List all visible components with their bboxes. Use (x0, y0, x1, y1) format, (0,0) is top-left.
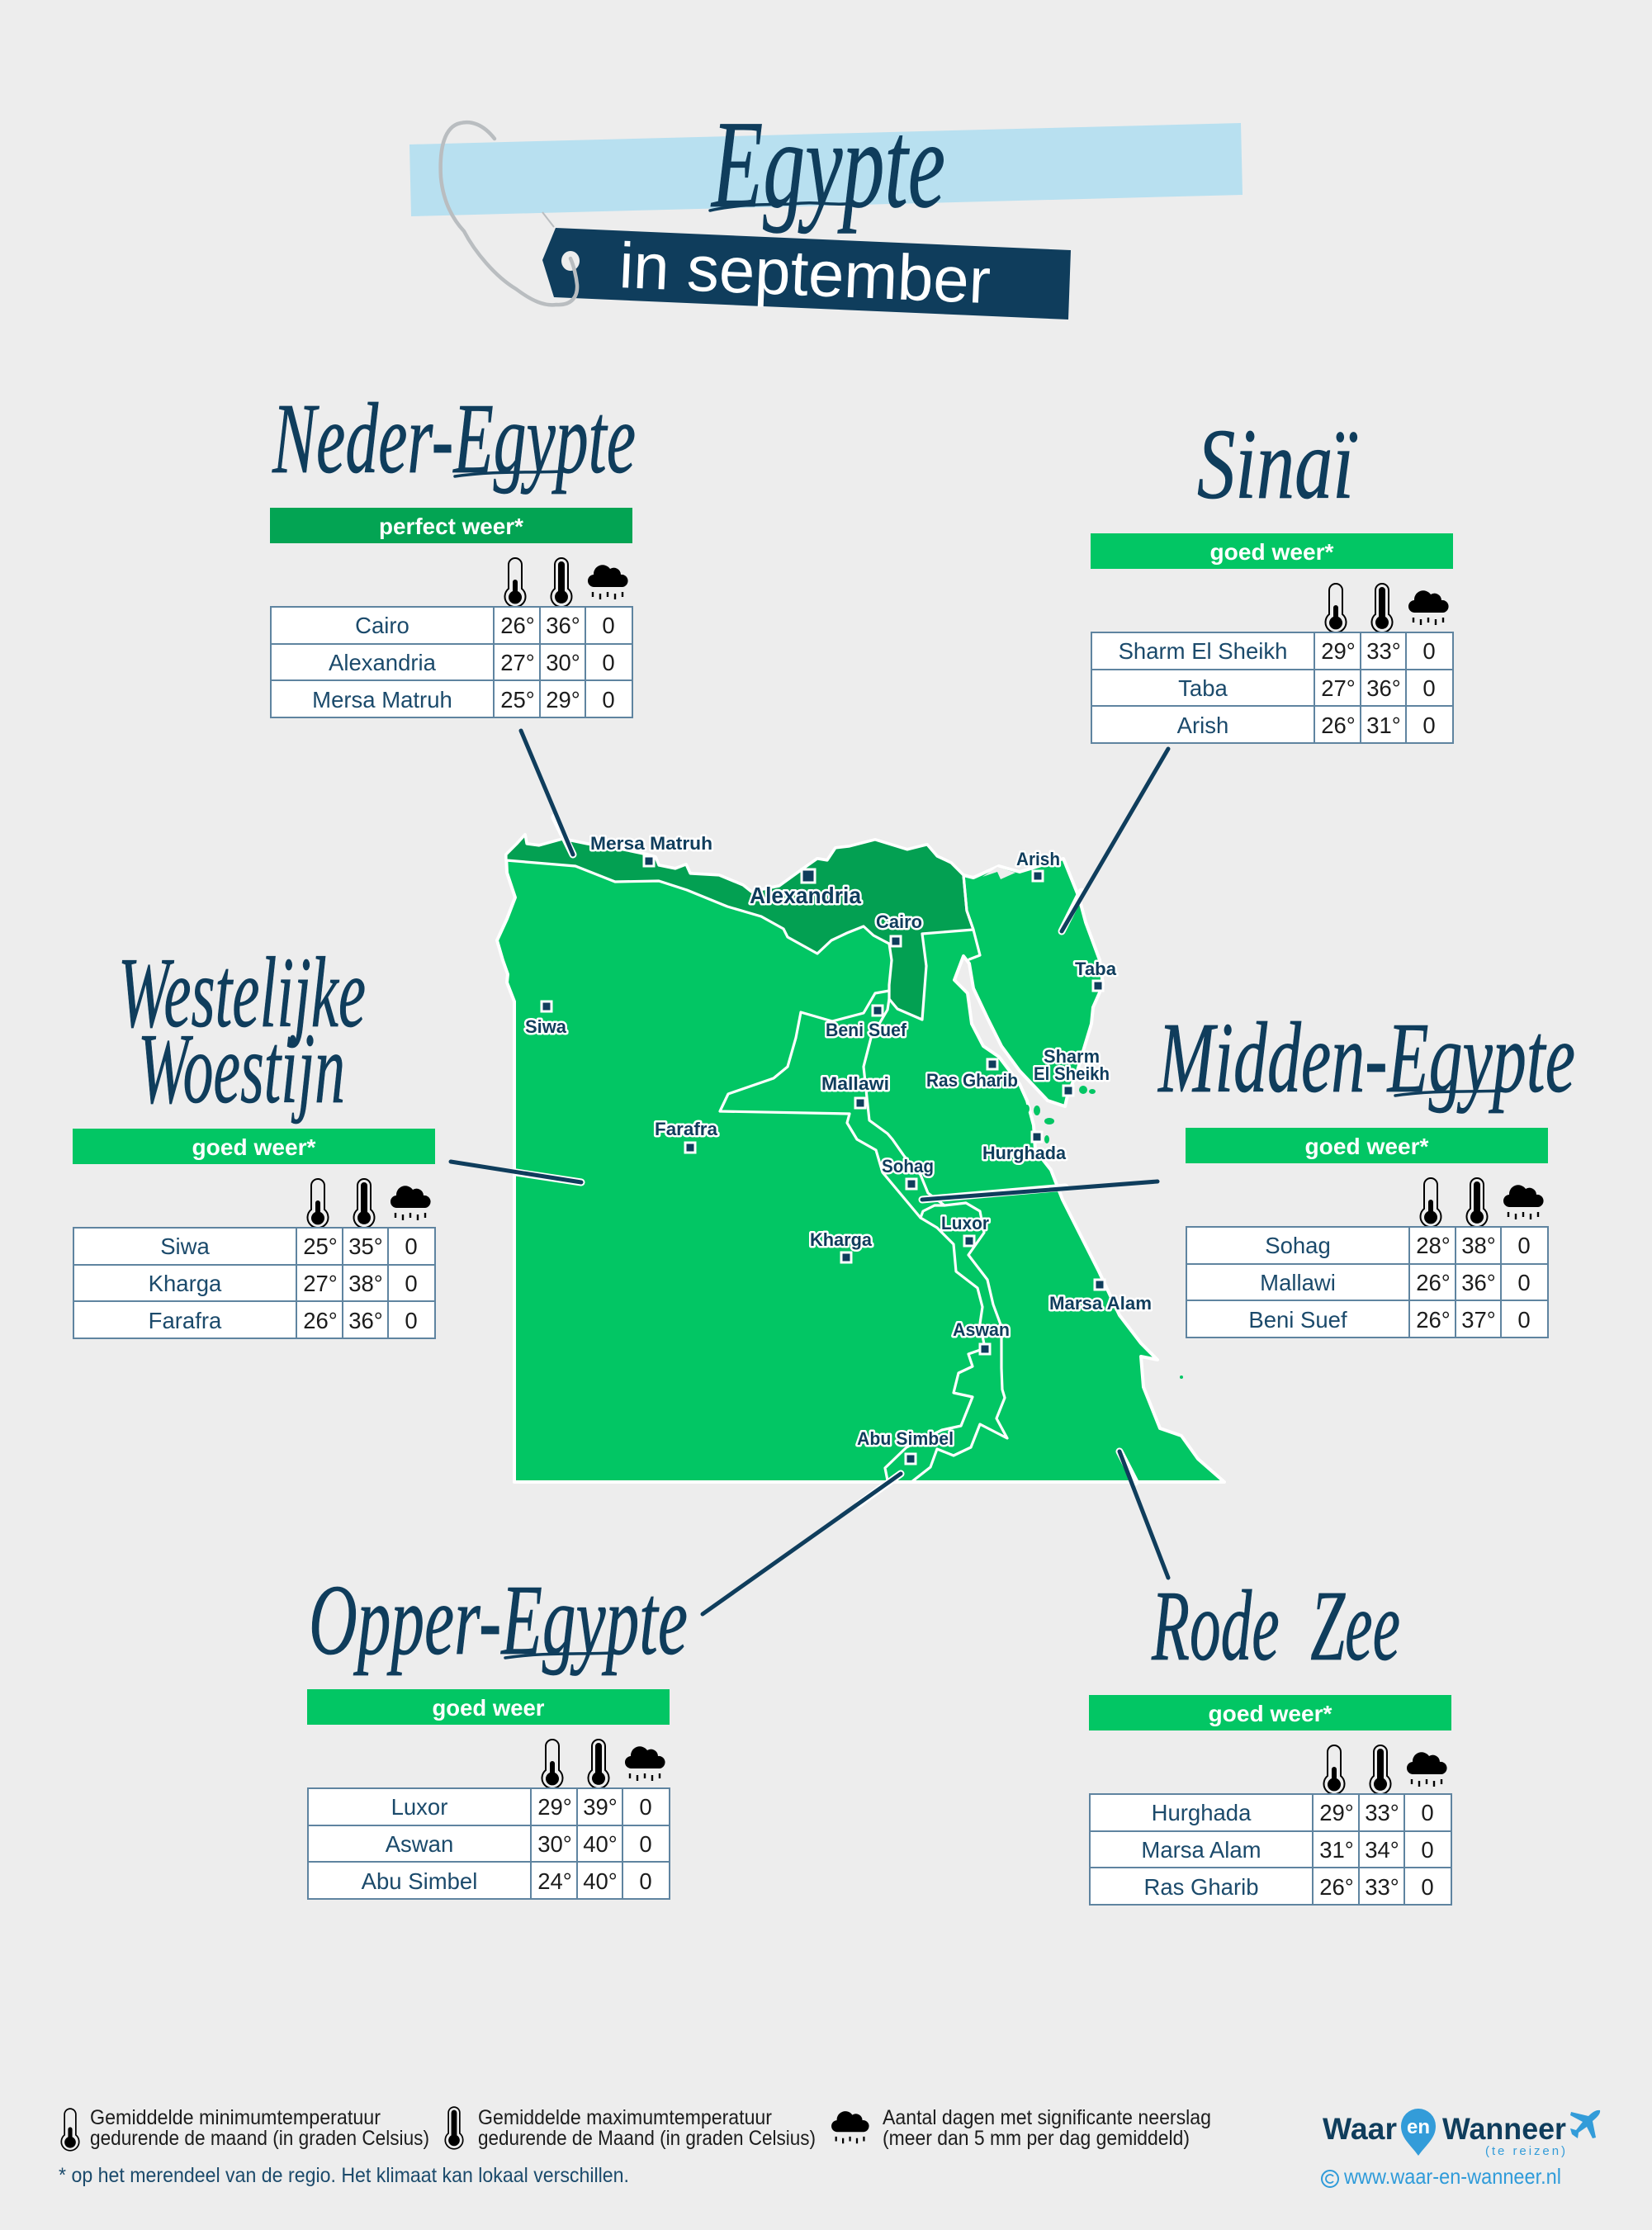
tag shape (542, 228, 1071, 320)
icon: minimum temperature (505, 558, 525, 607)
table cells: Alexandria (329, 650, 437, 675)
table cells: 34° (1365, 1837, 1399, 1863)
weather rating bar: goed weer (433, 1695, 545, 1721)
Red Sea islands (1025, 1086, 1183, 1379)
icon: maximum temperature (1466, 1178, 1488, 1227)
city: Alexandria: Alexandria (750, 883, 861, 908)
table cells: Sharm El Sheikh (1119, 638, 1287, 664)
table cells: 36° (1366, 675, 1401, 701)
table cells: 29° (537, 1794, 572, 1820)
weather table (1186, 1128, 1548, 1338)
legend: rain days: Aantal dagen met significante neerslag (883, 2106, 1211, 2129)
table cells (271, 607, 632, 717)
table cells: 27° (1321, 675, 1356, 701)
icon: rain (1503, 1185, 1544, 1219)
city: Ras Gharib (926, 1059, 1018, 1091)
panel: Rode Zee (1089, 1570, 1451, 1905)
city: Arish (1016, 849, 1060, 881)
table cells: 0 (405, 1308, 418, 1333)
heading: Neder-Egypte: Neder-Egypte (272, 383, 636, 495)
table cells: 35° (348, 1233, 383, 1259)
table cells: Marsa Alam (1141, 1837, 1261, 1863)
city: Hurghada (982, 1132, 1067, 1163)
table cells: 24° (537, 1868, 572, 1894)
weather rating bar: goed weer* (1210, 539, 1334, 565)
table cells: Mersa Matruh (312, 687, 452, 713)
table cells: 26° (303, 1308, 338, 1333)
table cells: 0 (639, 1794, 652, 1820)
table cells: 0 (639, 1868, 652, 1894)
icon: rain (1407, 1752, 1447, 1787)
icon: minimum temperature (1420, 1178, 1441, 1227)
city: Sharm El Sheikh: Sharm (1044, 1046, 1100, 1067)
table cells: Abu Simbel (362, 1868, 477, 1894)
weather rating bar (270, 508, 632, 543)
region borders (963, 875, 980, 959)
logo tagline: (te reizen) (1485, 2144, 1565, 2158)
table cells: 40° (583, 1868, 618, 1894)
leader line: Rode Zee (1119, 1451, 1168, 1578)
table cells: Cairo (355, 613, 409, 638)
weather table (1089, 1695, 1451, 1905)
heading swash (505, 1653, 615, 1658)
table cells: Beni Suef (1248, 1307, 1347, 1333)
table cells: 31° (1319, 1837, 1354, 1863)
icon: maximum temperature (588, 1740, 609, 1788)
legend (59, 2106, 1211, 2187)
weather rating bar: perfect weer* (379, 514, 523, 539)
weather table (73, 1129, 435, 1338)
table cells: 38° (348, 1271, 383, 1296)
logo word: Waar: Waar (1323, 2112, 1397, 2146)
city: Alexandria (750, 869, 861, 908)
title band (409, 123, 1243, 216)
table cells: 28° (1416, 1233, 1451, 1258)
city: Ras Gharib: Ras Gharib (926, 1070, 1018, 1091)
icon: minimum temperature (307, 1179, 329, 1228)
table cells: 29° (1321, 638, 1356, 664)
table cells: 0 (1517, 1233, 1531, 1258)
footnote: * op het merendeel van de regio. Het klimaat kan lokaal verschillen. (59, 2164, 629, 2187)
table cells: 0 (1422, 638, 1436, 664)
leader line: Midden-Egypte (922, 1181, 1157, 1200)
weather rating bar (307, 1689, 670, 1725)
table cells: 33° (1365, 1874, 1399, 1900)
table cells (73, 1228, 435, 1338)
table cells: 27° (500, 650, 535, 675)
title word: Egypte: Egypte (711, 95, 945, 234)
legend: maximum temperature (445, 2106, 816, 2150)
table cells: Aswan (386, 1831, 453, 1857)
table cells: 0 (1421, 1800, 1434, 1825)
leader line: Westelijke Woestijn (451, 1162, 581, 1182)
table cells: 30° (537, 1831, 572, 1857)
website: www.waar-en-wanneer.nl (1343, 2164, 1561, 2189)
panel: Sinaï (1091, 409, 1453, 743)
table cells: 26° (1319, 1874, 1354, 1900)
table cells (1186, 1227, 1548, 1338)
weather rating bar (1089, 1695, 1451, 1730)
city: Mersa Matruh: Mersa Matruh (590, 833, 712, 854)
table cells: Arish (1177, 713, 1228, 738)
weather table (270, 508, 632, 717)
copyright icon (1322, 2171, 1338, 2187)
leader line: Neder-Egypte (521, 731, 573, 855)
icon: maximum temperature (1372, 584, 1392, 632)
table cells: 36° (546, 613, 580, 638)
weather rating bar: goed weer* (1304, 1134, 1429, 1159)
heading: Rode Zee: Rode Zee (1151, 1570, 1400, 1682)
table cells: Kharga (149, 1271, 222, 1296)
legend: rain days: (meer dan 5 mm per dag gemiddeld) (883, 2127, 1190, 2150)
weather rating bar: goed weer* (192, 1134, 316, 1160)
icon: airplane (1570, 2110, 1600, 2138)
city: Marsa Alam (1049, 1280, 1152, 1314)
city: Kharga: Kharga (810, 1229, 873, 1250)
city: Abu Simbel (857, 1428, 954, 1464)
table cells: 0 (639, 1831, 652, 1857)
city: Aswan (953, 1319, 1010, 1354)
city: Sohag (882, 1156, 934, 1189)
table cells: 0 (602, 650, 615, 675)
city: Mersa Matruh (590, 833, 712, 866)
city: Farafra: Farafra (655, 1119, 718, 1139)
icon: rain (588, 565, 628, 599)
table cells: Farafra (149, 1308, 222, 1333)
table cells: 0 (1422, 713, 1436, 738)
icon: minimum temperature (1324, 1745, 1344, 1794)
coastal lagoon (982, 867, 1015, 879)
city: Marsa Alam: Marsa Alam (1049, 1293, 1152, 1314)
map of Egypt (497, 833, 1224, 1482)
city: Kharga (810, 1229, 873, 1262)
heading swash (455, 471, 563, 476)
heading: Sinaï: Sinaï (1197, 409, 1357, 520)
table cells: 26° (500, 613, 535, 638)
city: Taba: Taba (1075, 959, 1117, 979)
city: Luxor: Luxor (941, 1213, 989, 1233)
city: Beni Suef (826, 1006, 907, 1040)
title: luggage tag with Egypte in september (409, 95, 1243, 320)
legend: maximum temperature: gedurende de Maand (in graden Celsius) (478, 2127, 816, 2150)
city: Sharm El Sheikh (1034, 1046, 1110, 1096)
city: Luxor (941, 1213, 989, 1246)
heading: Westelijke Woestijn: Woestijn (138, 1013, 345, 1124)
table cells: 33° (1366, 638, 1401, 664)
table cells: 0 (602, 613, 615, 638)
panel: Neder-Egypte (270, 383, 636, 717)
table cells: Luxor (391, 1794, 447, 1820)
heading: Westelijke Woestijn: Westelijke (118, 937, 366, 1049)
icon: minimum temperature (1326, 584, 1346, 632)
table cells (1090, 1794, 1451, 1905)
legend: rain days (831, 2106, 1211, 2150)
table cells: Hurghada (1152, 1800, 1252, 1825)
title swash (710, 203, 852, 211)
icon: rain (391, 1186, 431, 1220)
tag ring (441, 122, 577, 305)
icon: minimum temperature (542, 1740, 563, 1788)
table cells: 0 (1517, 1307, 1531, 1333)
table cells: 0 (602, 687, 615, 713)
city: Aswan: Aswan (953, 1319, 1010, 1340)
city: Cairo (876, 911, 922, 946)
legend: minimum temperature: gedurende de maand (in graden Celsius) (90, 2127, 429, 2150)
icon: map pin (1401, 2109, 1436, 2156)
icon: rain (625, 1746, 665, 1781)
heading: Westelijke Woestijn (118, 937, 366, 1124)
city: Farafra (655, 1119, 718, 1153)
table cells: 29° (1319, 1800, 1354, 1825)
city: Cairo: Cairo (876, 911, 922, 932)
table cells: 39° (583, 1794, 618, 1820)
table cells: 0 (405, 1233, 418, 1259)
table cells: Taba (1178, 675, 1228, 701)
tag hole (561, 251, 580, 271)
table cells: 37° (1461, 1307, 1496, 1333)
region: Neder-Egypte (506, 835, 973, 1020)
table cells: 40° (583, 1831, 618, 1857)
city: Siwa: Siwa (525, 1016, 567, 1037)
table cells: 38° (1461, 1233, 1496, 1258)
city: Hurghada: Hurghada (982, 1143, 1067, 1163)
icon: map pin: en (1407, 2116, 1430, 2138)
city: Mallawi (821, 1073, 889, 1108)
heading swash (1395, 1091, 1504, 1096)
table cells: 26° (1321, 713, 1356, 738)
city: Mallawi: Mallawi (821, 1073, 889, 1094)
table cells: Mallawi (1260, 1270, 1336, 1295)
table cells: 26° (1416, 1307, 1451, 1333)
city: Arish: Arish (1016, 849, 1060, 869)
city: Beni Suef: Beni Suef (826, 1020, 907, 1040)
legend: minimum temperature (61, 2106, 429, 2151)
country shape (497, 835, 1224, 1482)
table cells: 25° (303, 1233, 338, 1259)
logo word: Wanneer: Wanneer (1442, 2112, 1566, 2146)
leader line: Sinaï (1062, 749, 1168, 931)
icon: maximum temperature (551, 558, 571, 607)
table cells: Siwa (160, 1233, 211, 1259)
icon: maximum temperature (1370, 1745, 1390, 1794)
table cells (308, 1788, 670, 1899)
legend: minimum temperature: Gemiddelde minimumtemperatuur (90, 2106, 381, 2129)
table cells: 25° (500, 687, 535, 713)
weather table (307, 1689, 670, 1899)
table cells: 0 (1517, 1270, 1531, 1295)
subtitle: in september: in september (618, 229, 992, 317)
weather table (1091, 533, 1453, 743)
city: Taba (1075, 959, 1117, 991)
icon: rain (1408, 590, 1449, 625)
panel: Opper-Egypte (307, 1565, 688, 1899)
city: Sohag: Sohag (882, 1156, 934, 1177)
table cells: 29° (546, 687, 580, 713)
table cells: 36° (348, 1308, 383, 1333)
icon: maximum temperature (353, 1179, 375, 1228)
heading: Opper-Egypte: Opper-Egypte (309, 1565, 688, 1676)
logo: Waar en Wanneer (1322, 2109, 1600, 2189)
table cells: 26° (1416, 1270, 1451, 1295)
table cells: 27° (303, 1271, 338, 1296)
table cells: 0 (405, 1271, 418, 1296)
weather rating bar (1091, 533, 1453, 569)
tag string (542, 212, 554, 227)
table cells: 33° (1365, 1800, 1399, 1825)
panel: Midden-Egypte (1157, 1002, 1575, 1338)
table cells: 31° (1366, 713, 1401, 738)
weather rating bar: goed weer* (1209, 1701, 1332, 1726)
table cells: 0 (1421, 1837, 1434, 1863)
table cells: 36° (1461, 1270, 1496, 1295)
leader line: Opper-Egypte (703, 1474, 901, 1614)
table cells: Sohag (1265, 1233, 1331, 1258)
panel: Westelijke Woestijn (73, 937, 435, 1338)
table cells: 30° (546, 650, 580, 675)
weather rating bar (1186, 1128, 1548, 1163)
city: Abu Simbel: Abu Simbel (857, 1428, 954, 1449)
city: Sharm El Sheikh: El Sheikh (1034, 1063, 1110, 1084)
table cells: 0 (1421, 1874, 1434, 1900)
table cells: 0 (1422, 675, 1436, 701)
weather rating bar (73, 1129, 435, 1164)
city: Siwa (525, 1001, 567, 1037)
table cells (1091, 632, 1453, 743)
table cells: Ras Gharib (1143, 1874, 1259, 1900)
legend: maximum temperature: Gemiddelde maximumtemperatuur (478, 2106, 772, 2129)
